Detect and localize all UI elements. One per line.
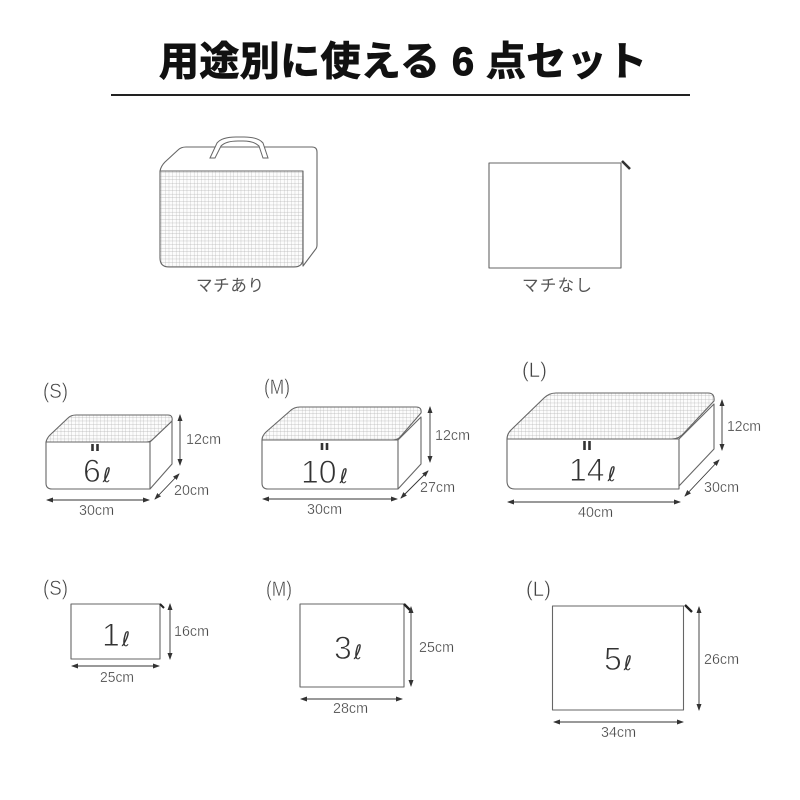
box L body [507, 404, 714, 489]
dimension labels: 30cm [307, 502, 342, 518]
box L mesh top [507, 393, 714, 439]
pouch S volume: 1ℓ [102, 617, 130, 653]
bag top and side [160, 147, 317, 266]
dimension arrow: depth [401, 471, 428, 498]
box M zipper [322, 443, 327, 450]
dimension labels [100, 624, 209, 686]
pouch L zipper [685, 605, 692, 612]
box M mesh top [262, 407, 421, 440]
dimension labels: 16cm [174, 624, 209, 640]
pouch S zipper [160, 604, 164, 608]
bag handle [210, 137, 268, 158]
dimension labels [79, 432, 221, 519]
box L zipper [584, 441, 590, 450]
dimension labels: 30cm [79, 503, 114, 519]
panel: pouch M [266, 578, 454, 717]
dimension arrow: height [410, 607, 412, 686]
box S volume: 6ℓ [83, 453, 111, 489]
box S mesh top [46, 415, 172, 442]
dimension labels: 34cm [601, 725, 636, 741]
pouch M volume: 3ℓ [334, 630, 362, 666]
dimension arrow: height [429, 407, 431, 462]
dimension labels: 40cm [578, 505, 613, 521]
dimension labels [578, 419, 761, 521]
title underline [111, 94, 690, 96]
size label M: (M) [266, 578, 292, 601]
dimension labels: 27cm [420, 480, 455, 496]
size label L: (L) [526, 578, 551, 601]
box M volume: 10ℓ [301, 454, 348, 490]
dimension labels: 12cm [186, 432, 221, 448]
size label L: (L) [522, 359, 547, 382]
size label S: (S) [43, 380, 68, 403]
dimension labels: 20cm [174, 483, 209, 499]
title: 用途別に使える 6 点セット [159, 40, 647, 84]
label: with gusset: マチあり [196, 276, 264, 295]
dimension arrow: height [698, 607, 700, 710]
panel: gusseted bag [160, 137, 317, 295]
pouch S outline [71, 604, 160, 659]
dimension labels: 26cm [704, 652, 739, 668]
dimension arrow: width [554, 721, 683, 723]
panel: pouch L [526, 578, 739, 741]
panel: box L [507, 359, 761, 521]
pouch L outline [552, 606, 684, 710]
pouch L volume: 5ℓ [604, 641, 632, 677]
panel: box S [43, 380, 221, 519]
box L volume: 14ℓ [569, 452, 616, 488]
dimension labels: 12cm [435, 428, 470, 444]
bag mesh front [160, 171, 303, 267]
dimension arrow: depth [685, 460, 719, 496]
box S zipper [92, 444, 98, 451]
size label S: (S) [43, 577, 68, 600]
dimension labels: 12cm [727, 419, 761, 435]
flat pouch outline [489, 163, 621, 268]
box S body [46, 421, 172, 489]
dimension labels: 28cm [333, 701, 368, 717]
dimension arrow: width [47, 499, 149, 501]
dimension arrow: height [721, 400, 723, 450]
panel: flat pouch [489, 161, 630, 295]
dimension arrow: width [508, 501, 680, 503]
panel: pouch S [43, 577, 209, 686]
dimension labels: 25cm [100, 670, 134, 686]
dimension labels: 30cm [704, 480, 739, 496]
flat pouch zipper pull [622, 161, 630, 169]
dimension arrow: height [179, 415, 181, 465]
dimension labels [307, 428, 470, 518]
dimension arrow: width [72, 665, 159, 667]
dimension arrow: depth [155, 474, 179, 499]
dimension arrow: width [301, 698, 402, 700]
dimension labels [333, 640, 454, 717]
dimension arrow: width [263, 498, 397, 500]
box M body [262, 417, 421, 489]
pouch M outline [300, 604, 404, 687]
panel: box M [262, 376, 470, 518]
pouch M zipper [404, 604, 410, 610]
dimension arrow: height [169, 604, 171, 659]
dimension labels [601, 652, 739, 741]
label: without gusset: マチなし [522, 276, 592, 295]
size label M: (M) [264, 376, 290, 399]
dimension labels: 25cm [419, 640, 454, 656]
